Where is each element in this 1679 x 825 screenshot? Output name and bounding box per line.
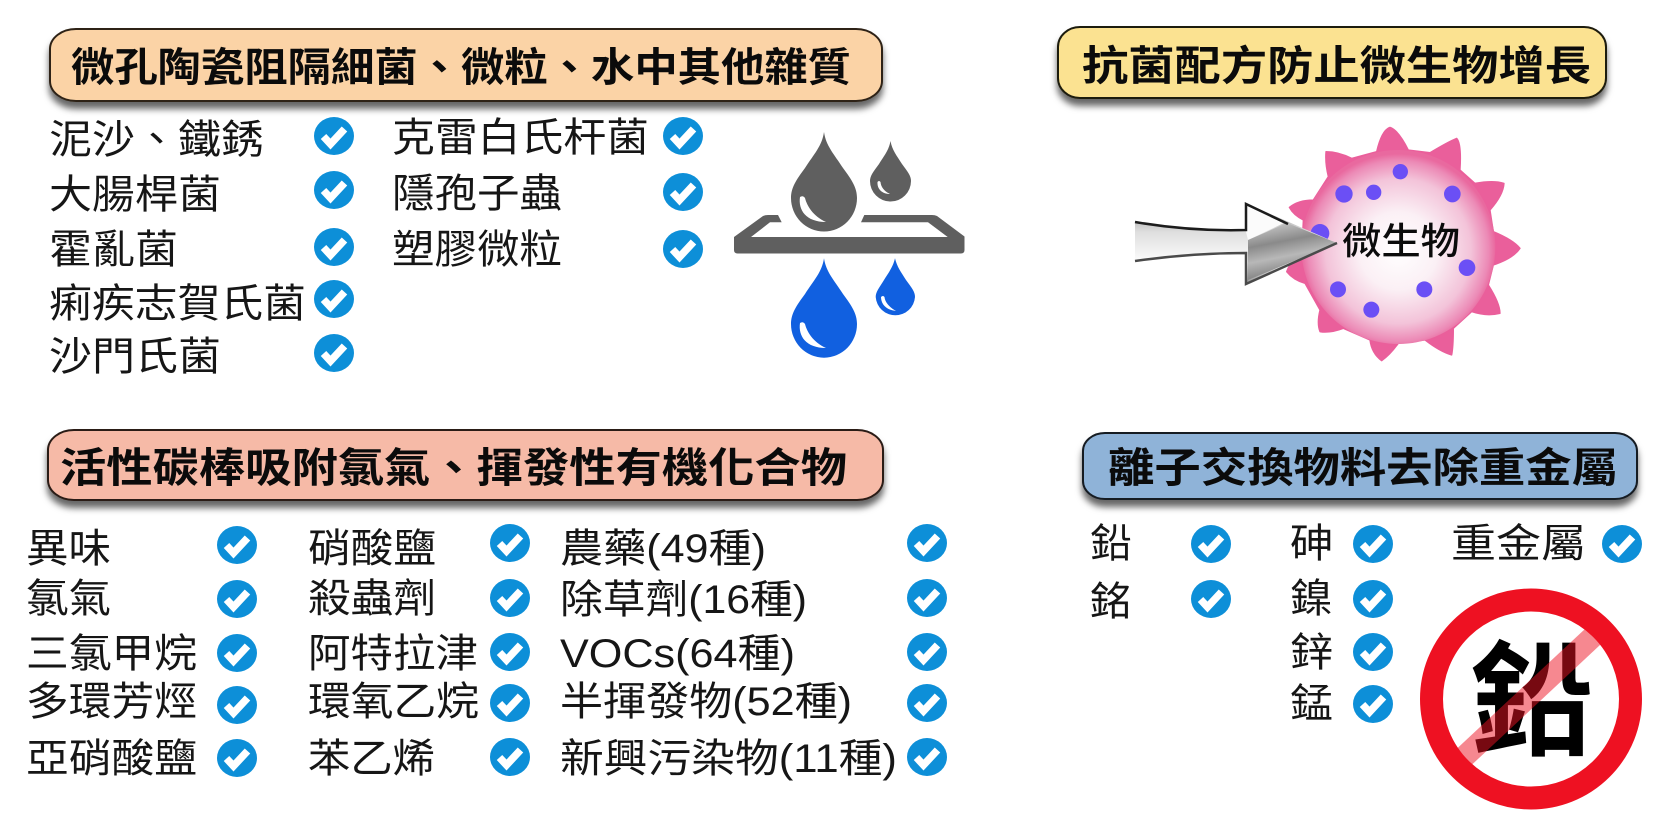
item: 霍亂菌 <box>49 228 178 272</box>
item <box>49 228 354 272</box>
icon: microbe <box>1287 127 1520 361</box>
item: 大腸桿菌 <box>49 173 221 217</box>
list: metals one <box>1090 522 1231 624</box>
item: 異味 <box>26 527 111 571</box>
item: 錳 <box>1290 682 1333 726</box>
item: 鋅 <box>1290 631 1333 675</box>
icon: water filter <box>734 132 964 358</box>
item <box>1290 522 1393 566</box>
item: 硝酸鹽 <box>308 527 436 571</box>
item <box>308 524 530 571</box>
item <box>1090 522 1231 566</box>
panel: antibacterial <box>1058 27 1606 361</box>
panel: ion exchange <box>1083 433 1642 798</box>
list: heavy metals: 重金屬 <box>1451 522 1586 566</box>
item: 多環芳烴 <box>26 680 197 724</box>
item <box>49 117 354 162</box>
item <box>392 228 703 272</box>
item: 新興污染物(11種) <box>560 737 897 781</box>
item <box>308 737 530 781</box>
item <box>1090 580 1231 624</box>
item <box>26 632 257 676</box>
icon: no lead sign <box>1432 600 1630 798</box>
item: 三氯甲烷 <box>26 632 197 676</box>
label: microbe: 微生物 <box>1342 211 1460 265</box>
item <box>26 737 257 781</box>
panel: ceramic filtration <box>49 29 964 379</box>
item <box>308 577 530 621</box>
heading: antibacterial <box>1058 27 1606 98</box>
item: 痢疾志賀氏菌 <box>49 282 306 326</box>
item: 鎳 <box>1290 577 1333 621</box>
item <box>26 526 257 571</box>
item: 阿特拉津 <box>308 632 478 676</box>
heading: carbon: 活性碳棒吸附氯氣、揮發性有機化合物 <box>60 434 847 494</box>
item: 氯氣 <box>26 577 111 621</box>
item: 鉛 <box>1090 522 1132 566</box>
item <box>392 172 703 216</box>
panel: activated carbon <box>26 430 947 781</box>
item: 銘 <box>1090 580 1132 624</box>
item <box>560 524 947 571</box>
item: 殺蟲劑 <box>308 577 436 621</box>
icon: no lead sign: 鉛 <box>1470 601 1594 781</box>
item <box>1290 631 1393 675</box>
heading: ion exchange: 離子交換物料去除重金屬 <box>1108 434 1618 494</box>
heading: ceramic: 微孔陶瓷阻隔細菌、微粒、水中其他雜質 <box>71 35 851 93</box>
item: 泥沙、鐵銹 <box>49 118 264 162</box>
item <box>1290 577 1393 621</box>
arrow: silver <box>1135 203 1337 285</box>
item: 沙門氏菌 <box>49 335 221 379</box>
item: 除草劑(16種) <box>560 578 807 622</box>
item: 隱孢子蟲 <box>392 172 562 216</box>
item: 亞硝酸鹽 <box>26 737 197 781</box>
list: heavy metals <box>1451 522 1642 566</box>
list: column one <box>49 117 354 379</box>
list: column C <box>560 524 947 781</box>
heading: ceramic <box>50 29 882 101</box>
item <box>49 334 354 379</box>
item <box>26 680 257 724</box>
item <box>26 577 257 621</box>
list: column B <box>308 524 530 781</box>
item: VOCs(64種) <box>560 632 795 676</box>
item: 塑膠微粒 <box>392 228 562 272</box>
item <box>560 632 947 676</box>
item: 半揮發物(52種) <box>560 680 852 724</box>
item: 農藥(49種) <box>560 527 766 571</box>
item <box>1290 682 1393 726</box>
item <box>560 578 947 622</box>
item: 砷 <box>1290 522 1333 566</box>
item: 環氧乙烷 <box>308 680 479 724</box>
heading: antibacterial: 抗菌配方防止微生物增長 <box>1082 32 1591 92</box>
item: 苯乙烯 <box>308 737 435 781</box>
list: metals two <box>1290 522 1393 726</box>
item <box>49 171 354 217</box>
list: column A <box>26 526 257 781</box>
item: 克雷白氏杆菌 <box>392 116 649 160</box>
list: column two <box>392 116 703 272</box>
